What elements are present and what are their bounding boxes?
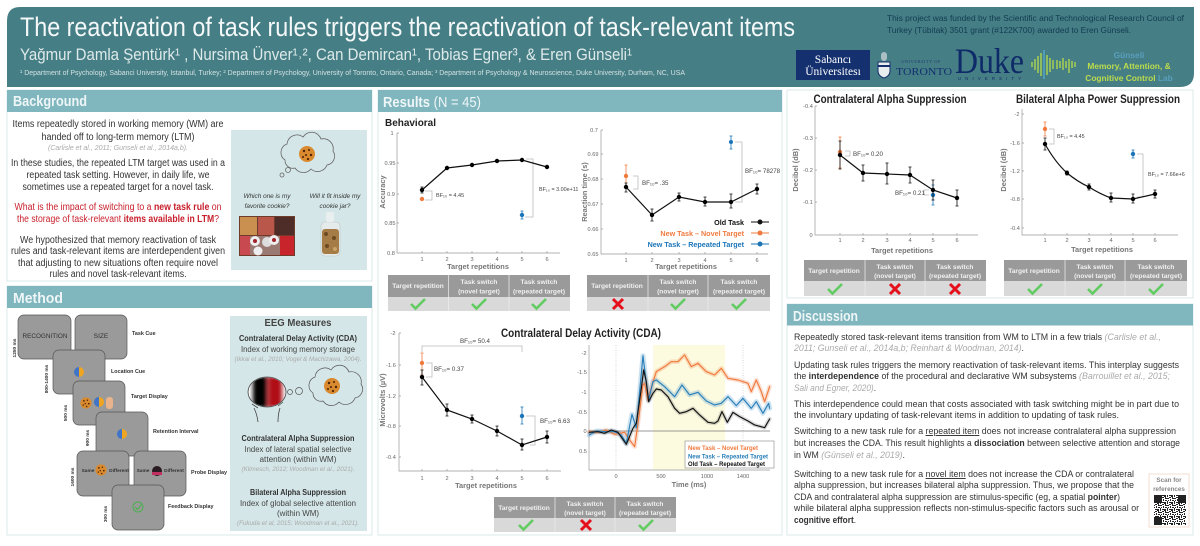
- chart: contralateral alpha: -0.3: [803, 136, 813, 142]
- QR code callout: Scan for: [1156, 477, 1182, 484]
- chart: reaction time: 2: [650, 258, 654, 264]
- legend: behavioral: Old Task: [714, 218, 744, 227]
- heading: CDA: Contralateral Delay Activity (CDA): [501, 326, 661, 340]
- chart: CDA waveform: 0.5: [579, 449, 587, 455]
- chart: CDA by repetitions: [378, 331, 570, 490]
- discussion text: alpha suppression, but increases bilateral alpha suppression. Thus, we propose that the: [794, 480, 1134, 491]
- chart: reaction time: 5: [729, 258, 733, 264]
- chart: bilateral alpha: 4: [1109, 238, 1113, 244]
- lab name: Günseli: [1114, 50, 1144, 60]
- table: contralateral alpha: Task switch: [937, 264, 973, 271]
- table: reaction time: Task switch: [721, 279, 757, 286]
- chart: accuracy: 6: [545, 257, 549, 263]
- task timeline: 1600 ms: [70, 467, 76, 486]
- logo: Duke University: Duke: [955, 41, 1024, 81]
- table: reaction time: Task switch: [660, 279, 696, 286]
- discussion text: the involuntary updating of task-relevant items in addition to updating of task rules.: [794, 410, 1119, 421]
- chart: reaction time: 3: [677, 258, 681, 264]
- chart: CDA by repetitions: 3: [470, 476, 474, 482]
- task timeline: Task Cue: [132, 331, 156, 337]
- panel: alpha results: [787, 90, 1193, 298]
- chart: accuracy: Target repetitions: [447, 262, 509, 271]
- task timeline: Location Cue: [111, 369, 145, 375]
- table: bilateral alpha: [1004, 260, 1187, 296]
- table: accuracy: (repeated target): [513, 288, 565, 296]
- chart: CDA waveform: 1000: [701, 474, 713, 480]
- logo: University of Toronto: UNIVERSITY OF: [901, 59, 941, 64]
- table: accuracy: (novel target): [458, 288, 500, 296]
- discussion text: This interdependence could mean that costs associated with task switching might be in part due to: [794, 399, 1179, 410]
- background text: Items repeatedly stored in working memory (WM) are: [12, 119, 224, 130]
- task timeline: RECOGNITION: [22, 333, 68, 340]
- discussion text: 2011; Gunseli et al., 2014a,b; Reinhart & Woodman, 2014).: [793, 343, 1024, 354]
- chart: bilateral alpha: Decibel (dB): [999, 148, 1008, 192]
- chart: CDA by repetitions: 6: [545, 476, 549, 482]
- chart: reaction time: 1: [624, 258, 628, 264]
- legend: behavioral: New Task – Novel Target: [660, 229, 745, 238]
- chart: CDA waveform: -1.5: [577, 370, 587, 376]
- panel: results: [378, 90, 782, 535]
- panel: discussion: [787, 304, 1193, 535]
- background text: rules and task-relevant items are interdependent given: [11, 246, 225, 257]
- chart: contralateral alpha: 6: [955, 238, 959, 244]
- chart: bilateral alpha: Target repetitions: [1071, 245, 1133, 254]
- chart: accuracy: 0.8: [387, 251, 395, 257]
- chart: reaction time: Target repetitions: [655, 262, 717, 271]
- chart: contralateral alpha: -0.2: [803, 168, 813, 174]
- funding note: This project was funded by the Scientific and Technological Research Council of: [887, 13, 1185, 23]
- image: cookie box: [239, 216, 295, 256]
- chart: contralateral alpha: -0.1: [803, 200, 813, 206]
- discussion text: the interdependence of the procedural and declarative WM subsystems (Barrouillet et al., 2015;: [794, 371, 1170, 382]
- chart: CDA by repetitions: BF₁₀= 0.37: [434, 366, 464, 373]
- task timeline: Target Display: [131, 394, 168, 400]
- chart: CDA by repetitions: 5: [520, 476, 524, 482]
- chart: reaction time: 0.69: [588, 152, 598, 158]
- chart: reaction time: 0.66: [588, 227, 598, 233]
- chart: contralateral alpha: 3: [885, 238, 889, 244]
- chart: reaction time: 0.68: [588, 177, 598, 183]
- chart: CDA waveform: [577, 345, 774, 489]
- table: CDA: Task switch: [567, 501, 603, 508]
- legend: CDA waveform: New Task – Novel Target: [688, 445, 759, 452]
- illustration: cookie thought: cookie jar?: [320, 203, 351, 210]
- legend: CDA waveform: [685, 441, 774, 468]
- chart: CDA by repetitions: BF₁₀= 50.4: [460, 338, 490, 345]
- task timeline: [12, 315, 227, 530]
- chart: CDA waveform: 0: [583, 429, 587, 435]
- background text: In these studies, the repeated LTM target was used in a: [11, 158, 225, 169]
- chart: CDA waveform: 0: [614, 474, 618, 480]
- chart: CDA waveform: 1400: [737, 474, 749, 480]
- chart: CDA waveform: -0.5: [577, 410, 587, 416]
- task timeline: 1250 ms: [12, 338, 18, 357]
- background text: the storage of task-relevant items available in LTM?: [17, 214, 219, 225]
- chart: bilateral alpha: BF₁₀ = 7.66e+6: [1148, 172, 1185, 178]
- logo: Duke University: UNIVERSITY: [958, 76, 1021, 81]
- heading: contralateral alpha: Contralateral Alpha Suppression: [814, 92, 966, 106]
- chart: bilateral alpha: -2: [1015, 112, 1019, 118]
- table: bilateral alpha: Target repetition: [1008, 268, 1060, 275]
- table: accuracy: Target repetition: [392, 283, 444, 290]
- chart: CDA by repetitions: -0.4: [386, 455, 396, 461]
- table: CDA: (repeated target): [619, 510, 671, 517]
- discussion text: cognitive effort.: [794, 515, 856, 526]
- panel: EEG measures: (Klimesch, 2012; Woodman et al., 2021).: [242, 466, 354, 473]
- chart: accuracy: 2: [445, 257, 449, 263]
- logo: Sabanci University: Üniversitesı: [805, 64, 861, 78]
- chart: reaction time: BF₁₀= .35: [642, 180, 669, 187]
- background text: repeated task setting. However, in daily life, we: [26, 170, 210, 181]
- discussion text: Switching to a new task rule for a novel item does not increase the CDA or contralateral: [794, 469, 1134, 480]
- discussion text: Repeatedly stored task-relevant items transition from WM to LTM in a few trials (Carlisle et al.,: [794, 332, 1161, 343]
- heading: method: [7, 286, 372, 308]
- chart: contralateral alpha: 4: [908, 238, 912, 244]
- chart: accuracy: Accuracy: [378, 174, 387, 209]
- background text: (Carlisle et al., 2011; Gunseli et al., 2014a,b).: [48, 143, 188, 152]
- panel: method: [7, 286, 372, 535]
- background text: We hypothesized that memory reactivation of task: [20, 235, 217, 246]
- discussion text: in WM (Günseli et al., 2019).: [794, 450, 905, 461]
- chart: accuracy: 1: [420, 257, 424, 263]
- chart: reaction time: BF₁₀= 78278: [745, 168, 781, 175]
- chart: reaction time: 6: [755, 258, 759, 264]
- table: reaction time: Target repetition: [591, 283, 643, 290]
- chart: bilateral alpha: -0.8: [1010, 197, 1020, 203]
- legend: behavioral: New Task – Repeated Target: [648, 240, 745, 249]
- panel: EEG measures: Index of global selective attention: [240, 498, 356, 508]
- chart: accuracy: BF₁₀ = 4.45: [436, 193, 464, 199]
- legend: CDA waveform: New Task – Repeated Target: [688, 454, 769, 460]
- heading: method: Method: [13, 290, 63, 307]
- funding note: Turkey (Tübitak) 3501 grant (#122K700) awarded to Eren Günseli.: [887, 25, 1131, 35]
- chart: bilateral alpha: 1: [1043, 238, 1047, 244]
- chart: bilateral alpha: BF₁₀ = 4.45: [1057, 134, 1085, 140]
- logo: lab waveform: [1032, 50, 1075, 79]
- chart: contralateral alpha: 1: [838, 238, 842, 244]
- chart: contralateral alpha: BF₁₀= 0.20: [853, 151, 883, 158]
- chart: accuracy: 3: [470, 257, 474, 263]
- QR code callout: [1149, 474, 1189, 527]
- heading: discussion: [787, 304, 1193, 326]
- chart: accuracy: 1: [390, 131, 394, 137]
- lab name: Cognitive Control Lab: [1085, 73, 1173, 83]
- chart: CDA by repetitions: BF₁₀= 6.63: [540, 418, 570, 425]
- chart: contralateral alpha: BF₁₀= 0.21: [895, 190, 925, 197]
- chart: accuracy: 4: [495, 257, 499, 263]
- illustration: cookie thought: Will it fit inside my: [310, 193, 361, 200]
- discussion text: Switching to a new task rule for a repeated item does not increase contralateral alpha suppression: [794, 426, 1176, 437]
- icon: brain activity head: [248, 365, 363, 422]
- chart: bilateral alpha: 5: [1131, 238, 1135, 244]
- logo: University of Toronto: TORONTO: [896, 66, 952, 78]
- chart: bilateral alpha: -0.4: [1010, 226, 1020, 232]
- heading: background: [7, 90, 372, 112]
- chart: bilateral alpha: -1.2: [1010, 169, 1020, 175]
- heading: results: Results (N = 45): [383, 94, 481, 111]
- discussion text: [793, 332, 1180, 526]
- chart: contralateral alpha: -0.4: [803, 104, 813, 110]
- task timeline: Different: [164, 468, 184, 474]
- table: reaction time: (repeated target): [713, 288, 765, 296]
- table: reaction time: (novel target): [657, 288, 699, 296]
- table: bilateral alpha: Task switch: [1077, 264, 1113, 271]
- chart: accuracy: [378, 131, 578, 271]
- table: CDA: [494, 497, 676, 532]
- task timeline: 500 ms: [63, 405, 69, 421]
- task timeline: 800-1400 ms: [44, 364, 50, 393]
- chart: CDA waveform: 500: [656, 474, 666, 480]
- lab name: Memory, Attention, &: [1087, 61, 1171, 71]
- chart: accuracy: 5: [520, 257, 524, 263]
- task timeline: Same: [137, 468, 150, 474]
- background text: rules and novel task-relevant items.: [50, 269, 186, 280]
- chart: reaction time: 0.65: [588, 252, 598, 258]
- heading: background: Background: [13, 93, 87, 110]
- table: CDA: Task switch: [627, 501, 663, 508]
- chart: reaction time: 0.67: [588, 202, 598, 208]
- panel: EEG measures: EEG Measures: [264, 318, 332, 329]
- task timeline: Feedback Display: [168, 504, 214, 510]
- discussion text: CDA and contralateral alpha suppression are stimulus-specific (eg, a spatial pointer): [794, 492, 1120, 503]
- chart: CDA by repetitions: Target repetitions: [455, 481, 517, 490]
- discussion text: Sali and Egner, 2020).: [794, 383, 876, 394]
- table: contralateral alpha: Target repetition: [808, 268, 860, 275]
- illustration: cookie thought: Which one is my: [244, 193, 291, 200]
- chart: CDA by repetitions: Microvolts (µV): [378, 373, 387, 427]
- chart: contralateral alpha: 5: [931, 238, 935, 244]
- chart: CDA by repetitions: -1.6: [386, 363, 396, 369]
- table: accuracy: [388, 275, 570, 311]
- background text: sometimes use a repeated target for a novel task.: [22, 182, 214, 193]
- illustration: cookie thought: favorite cookie?: [245, 203, 290, 210]
- funding note: [887, 13, 1185, 35]
- lab name: [1085, 50, 1173, 83]
- panel: EEG measures: Contralateral Alpha Suppression: [242, 433, 354, 443]
- chart: CDA by repetitions: -2: [391, 331, 395, 337]
- background text: [11, 119, 225, 280]
- task timeline: 300 ms: [103, 506, 109, 522]
- chart: CDA by repetitions: 1: [420, 476, 424, 482]
- title: The reactivation of task rules triggers the reactivation of task-relevant items: [20, 12, 795, 42]
- table: contralateral alpha: (repeated target): [929, 273, 981, 280]
- chart: reaction time: [580, 128, 781, 271]
- chart: contralateral alpha: 0: [809, 233, 813, 239]
- panel: EEG measures: (Fukuda et al, 2015; Woodman et al., 2021).: [237, 520, 359, 527]
- logo: University of Toronto: [878, 52, 952, 78]
- chart: contralateral alpha: Decibel (dB): [791, 148, 800, 192]
- panel: EEG measures: Index of working memory storage: [241, 344, 355, 354]
- heading: discussion: Discussion: [793, 308, 858, 325]
- task timeline: Different: [109, 468, 129, 474]
- background text: handed off to long-term memory (LTM): [42, 132, 194, 143]
- background text: that adjusting to new situations often require novel: [18, 258, 218, 269]
- logo: Sabanci University: Sabancı: [815, 54, 851, 66]
- table: contralateral alpha: (novel target): [874, 273, 916, 280]
- chart: CDA waveform: Time (ms): [672, 480, 707, 489]
- panel: EEG measures: Contralateral Delay Activity (CDA): [239, 333, 357, 343]
- task timeline: 900 ms: [85, 430, 91, 446]
- task timeline: SIZE: [94, 333, 109, 340]
- panel: EEG measures: Index of lateral spatial selective: [244, 444, 352, 454]
- chart: accuracy: 0.9: [387, 192, 395, 198]
- chart: bilateral alpha: [999, 109, 1185, 254]
- chart: contralateral alpha: Target repetitions: [871, 246, 933, 255]
- chart: CDA by repetitions: 2: [445, 476, 449, 482]
- affiliations: ¹ Department of Psychology, Sabanci University, Istanbul, Turkey; ² Department of Psychology, University of Toronto, Ontario, Canada; ³ Department of Psychology & Neuroscience, Duke University, Durham, NC, USA: [20, 70, 685, 77]
- chart: bilateral alpha: 6: [1153, 238, 1157, 244]
- discussion text: but increases the CDA. This result highlights a dissociation between selective attention and storage: [794, 438, 1180, 449]
- table: bilateral alpha: (novel target): [1074, 273, 1116, 280]
- chart: CDA waveform: -1: [582, 390, 586, 396]
- chart: bilateral alpha: 3: [1087, 238, 1091, 244]
- chart: CDA by repetitions: -1.2: [386, 394, 396, 400]
- table: accuracy: Task switch: [521, 279, 557, 286]
- logo: Sabanci University: [796, 50, 870, 80]
- panel: EEG measures: (Ikkai et al., 2010; Vogel & Machizawa, 2004).: [234, 356, 362, 363]
- panel: EEG measures: [230, 316, 367, 531]
- table: CDA: Target repetition: [498, 505, 550, 512]
- chart: CDA by repetitions: 4: [495, 476, 499, 482]
- table: contralateral alpha: Task switch: [877, 264, 913, 271]
- heading: results: [378, 90, 782, 112]
- chart: CDA by repetitions: -0.8: [386, 424, 396, 430]
- legend: behavioral: [648, 218, 769, 249]
- chart: CDA waveform: -2: [582, 351, 586, 357]
- task timeline: Same: [82, 468, 95, 474]
- chart: bilateral alpha: -1.6: [1010, 141, 1020, 147]
- chart: reaction time: 4: [703, 258, 707, 264]
- panel: background: [7, 90, 372, 281]
- header banner: [7, 7, 1194, 87]
- table: CDA: (novel target): [564, 510, 606, 517]
- table: bilateral alpha: (repeated target): [1130, 273, 1182, 280]
- chart: bilateral alpha: 2: [1065, 238, 1069, 244]
- task timeline: Probe Display: [191, 470, 227, 476]
- background text: What is the impact of switching to a new task rule on: [14, 202, 221, 213]
- table: contralateral alpha: [804, 260, 986, 296]
- panel: EEG measures: attention (within WM): [260, 454, 337, 464]
- chart: accuracy: 0.85: [385, 221, 395, 227]
- chart: accuracy: BF₁₀ = 3.00e+11: [539, 187, 578, 193]
- legend: CDA waveform: Old Task – Repeated Target: [688, 461, 766, 468]
- QR code callout: references: [1153, 486, 1185, 493]
- chart: contralateral alpha: [791, 104, 978, 255]
- subheading: behavioral: Behavioral: [385, 118, 436, 129]
- chart: reaction time: Reaction time (s): [580, 162, 589, 222]
- chart: accuracy: 0.95: [385, 161, 395, 167]
- illustration: cookie thought: [231, 130, 367, 270]
- authors: Yağmur Damla Şentürk¹ , Nursima Ünver¹˒², Can Demircan¹, Tobias Egner³, & Eren Günseli¹: [20, 46, 632, 64]
- table: reaction time: [587, 275, 770, 311]
- chart: reaction time: 0.7: [590, 128, 598, 134]
- task timeline: Retention Interval: [153, 429, 199, 435]
- discussion text: while bilateral alpha suppression reflects non-stimulus-specific factors such as arousal or: [793, 503, 1140, 514]
- panel: EEG measures: Bilateral Alpha Suppression: [250, 487, 346, 497]
- image: cookie jar: [321, 212, 340, 256]
- chart: contralateral alpha: 2: [861, 238, 865, 244]
- table: bilateral alpha: Task switch: [1138, 264, 1174, 271]
- table: accuracy: Task switch: [461, 279, 497, 286]
- panel: EEG measures: (within WM): [277, 508, 319, 518]
